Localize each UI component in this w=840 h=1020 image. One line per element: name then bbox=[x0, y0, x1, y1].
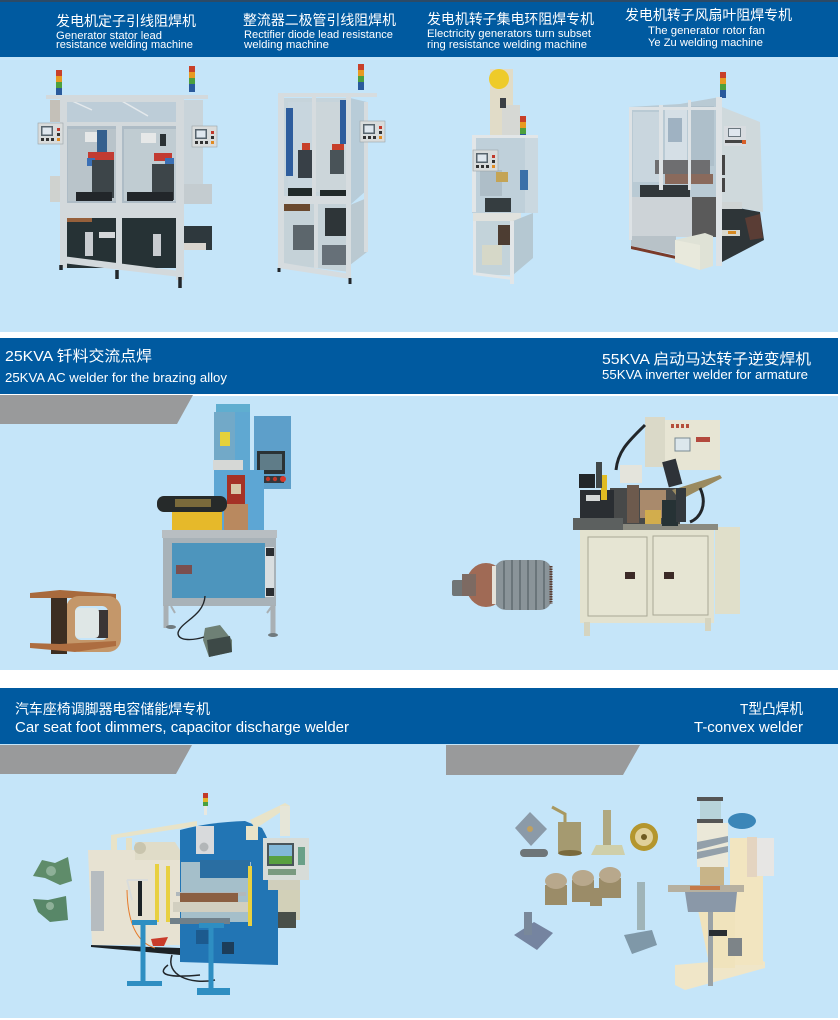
heading: rotor fan welder: 发电机转子风扇叶阻焊专机 bbox=[625, 7, 792, 23]
heading: rectifier diode welder bbox=[243, 12, 396, 51]
machine: slip ring welder bbox=[472, 69, 538, 284]
heading: slip ring welder: 发电机转子集电环阻焊专机 bbox=[427, 11, 594, 27]
yellow balancer reel bbox=[489, 69, 509, 89]
armature workpiece bbox=[452, 560, 552, 610]
machine: rectifier diode welder bbox=[278, 64, 385, 284]
heading: rectifier diode welder: 整流器二极管引线阻焊机 bbox=[243, 12, 396, 28]
heading: 25KVA spot welder: 25KVA AC welder for the brazing alloy bbox=[5, 370, 228, 385]
panel background bbox=[0, 396, 838, 670]
machine: capacitor discharge welder bbox=[88, 793, 309, 995]
heading: slip ring welder: Electricity generators turn subset bbox=[427, 28, 591, 40]
header band bbox=[0, 688, 838, 744]
grey label tab bbox=[0, 395, 193, 424]
heading: T-convex welder: T型凸焊机 bbox=[740, 701, 803, 718]
heading: 55KVA inverter welder bbox=[602, 351, 811, 382]
heading: 55KVA inverter welder: 55KVA 启动马达转子逆变焊机 bbox=[602, 351, 811, 368]
heading: rotor fan welder bbox=[625, 7, 792, 49]
machine: T-convex welder bbox=[668, 797, 774, 990]
panel: capacitor and T-convex welders bbox=[0, 688, 838, 1018]
heading: capacitor discharge welder: 汽车座椅调脚器电容储能焊专机 bbox=[15, 701, 210, 717]
heading: 55KVA inverter welder: 55KVA inverter welder for armature bbox=[602, 367, 808, 382]
coil workpiece bbox=[30, 590, 121, 654]
panel: 25KVA and 55KVA welders bbox=[0, 338, 838, 670]
heading: rectifier diode welder: Rectifier diode lead resistance bbox=[244, 29, 393, 41]
heading: rectifier diode welder: welding machine bbox=[243, 39, 329, 51]
panel background bbox=[0, 744, 838, 1018]
heading: stator lead welder: resistance welding machine bbox=[56, 39, 193, 51]
panel background bbox=[0, 57, 838, 332]
heading: 25KVA spot welder bbox=[5, 347, 228, 385]
green seat parts bbox=[33, 857, 72, 922]
top edge line bbox=[0, 0, 838, 2]
workpieces: T-convex samples bbox=[514, 807, 658, 954]
heading: stator lead welder: Generator stator lead bbox=[56, 30, 162, 42]
heading: capacitor discharge welder bbox=[15, 701, 349, 736]
header band bbox=[0, 2, 838, 57]
panel: generator welding machines bbox=[0, 2, 838, 332]
heading: slip ring welder bbox=[427, 11, 594, 51]
heading: slip ring welder: ring resistance welding machine bbox=[427, 39, 587, 51]
machine: stator lead welder bbox=[38, 66, 217, 288]
heading: T-convex welder bbox=[694, 701, 803, 736]
machine: rotor fan welder bbox=[629, 72, 764, 270]
heading: stator lead welder bbox=[56, 13, 196, 51]
heading: rotor fan welder: The generator rotor fan bbox=[648, 25, 765, 37]
heading: T-convex welder: T-convex welder bbox=[694, 719, 803, 736]
touch panel bbox=[263, 838, 309, 880]
heading: stator lead welder: 发电机定子引线阻焊机 bbox=[56, 13, 196, 29]
pedal stands bbox=[127, 920, 230, 995]
heading: 25KVA spot welder: 25KVA 钎料交流点焊 bbox=[5, 347, 152, 365]
machine: 55KVA inverter welder bbox=[573, 417, 740, 636]
grey label tab right bbox=[446, 745, 640, 775]
header band bbox=[0, 338, 838, 394]
heading: capacitor discharge welder: Car seat foot dimmers, capacitor discharge welder bbox=[15, 719, 349, 736]
foot pedal bbox=[178, 596, 232, 657]
machine: 25KVA spot welder bbox=[157, 404, 291, 657]
grey label tab left bbox=[0, 745, 192, 774]
heading: rotor fan welder: Ye Zu welding machine bbox=[648, 37, 763, 49]
